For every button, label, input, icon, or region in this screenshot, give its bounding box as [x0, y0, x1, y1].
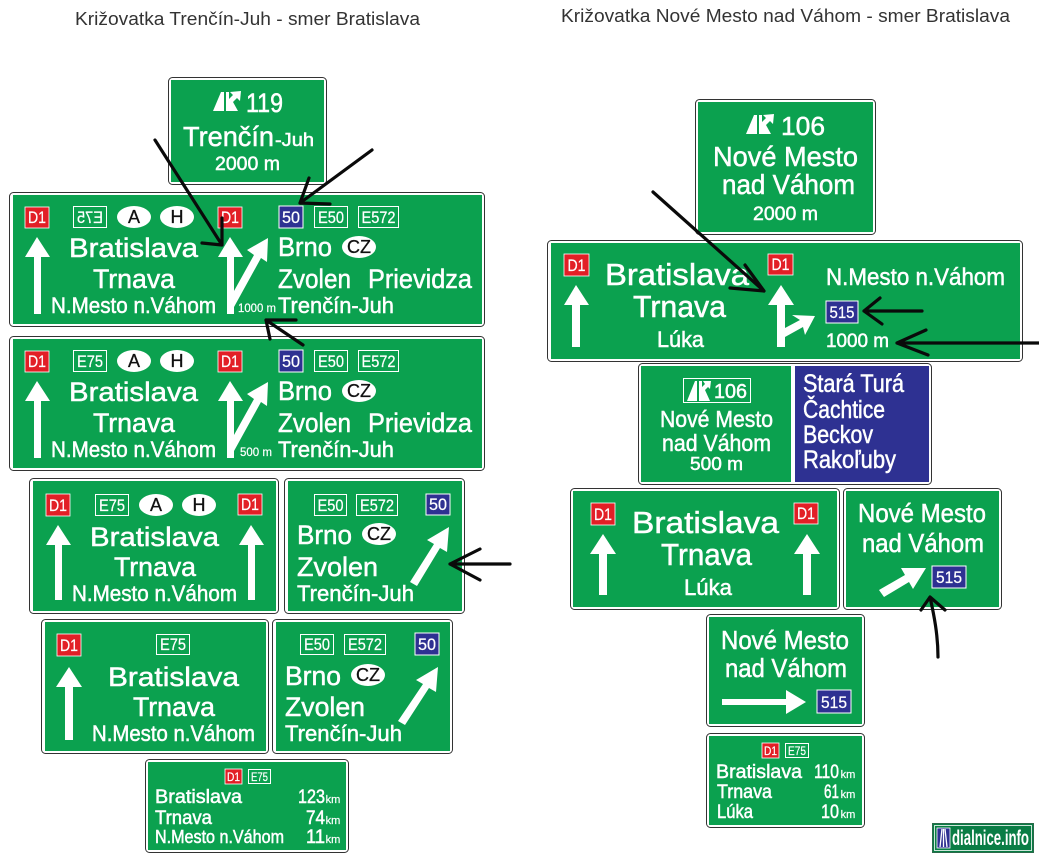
badge: E50: E50 [318, 352, 344, 371]
arrow: split [218, 237, 268, 314]
text: distances: 110 [814, 762, 839, 783]
annotation arrow: D1 right gantry [653, 192, 764, 291]
badge: A [139, 494, 173, 516]
arrow: straight [56, 667, 82, 740]
badge: H: H [170, 351, 184, 371]
distance: 2000 m [215, 154, 280, 175]
badge: E75: E75 [251, 770, 268, 784]
badge: D1: D1 [241, 495, 259, 514]
badge: 50 [279, 350, 303, 372]
badge: 50 [415, 633, 439, 655]
text: place names: Bratislava [716, 762, 802, 783]
badge: A: A [128, 351, 140, 371]
badge: E75: E75 [788, 744, 806, 758]
badge: D1: D1 [60, 636, 78, 655]
destination: Trenčín [183, 121, 274, 152]
sign: exit, Brno [272, 620, 452, 754]
badge: D1: D1 [28, 352, 46, 371]
text: place names: Bratislava [155, 787, 242, 808]
arrow: straight [564, 285, 589, 347]
text: destination: Nové Mesto [858, 498, 986, 528]
sign: straight lanes right [570, 488, 840, 610]
text: destination [858, 498, 986, 558]
sign: exit 119 Trenčín-Juh [168, 78, 326, 184]
annotation arrow: 1000 m right [897, 330, 1039, 355]
text: distances [298, 787, 340, 848]
badge: CZ [342, 380, 376, 402]
exit box: 106 [714, 381, 747, 403]
arrow: left straight [46, 525, 71, 600]
badge: H [160, 350, 194, 372]
badge: 50: 50 [282, 352, 300, 371]
badge: A [117, 350, 151, 372]
text: destination: nad Váhom [725, 653, 847, 683]
badge: E75: E75 [77, 352, 103, 371]
text: destinations: N.Mesto n.Váhom [51, 437, 216, 462]
annotation arrow: D1 on 1000 m sign [155, 140, 222, 245]
text: place names [716, 762, 802, 823]
arrow: right straight [794, 534, 820, 595]
text: destinations [285, 661, 402, 746]
badge: D1: D1 [49, 496, 67, 515]
text: place names: Lúka [717, 802, 753, 823]
text: destinations [51, 377, 216, 462]
text: destinations [72, 522, 237, 606]
text: destinations [297, 520, 414, 606]
text: distances: 61 [824, 782, 839, 803]
badge: D1: D1 [568, 256, 586, 275]
text: distances: 123 [298, 787, 325, 808]
badge: D1: D1 [594, 505, 612, 524]
text: destinations: N.Mesto n.Váhom [51, 293, 216, 318]
sign: exit ramp right [706, 614, 864, 726]
text: destinations: N.Mesto n.Váhom [72, 581, 237, 606]
exit number: 106 [781, 111, 825, 141]
annotation arrow: route 515 [864, 298, 922, 324]
text: destinations: Trnava [114, 552, 197, 582]
text: destination: Nové Mesto [660, 406, 773, 432]
text: exit destinations: Trenčín-Juh [278, 437, 394, 462]
text: destinations: Bratislava [108, 662, 240, 692]
badge: E75: E75 [99, 496, 125, 515]
text: distances: 11 [306, 827, 325, 848]
text: exit destinations [278, 232, 473, 318]
badge: E572: E572 [362, 352, 396, 371]
badge: D1: D1 [28, 208, 46, 227]
text: destinations: Bratislava [69, 377, 199, 407]
arrow: split [218, 381, 268, 458]
arrow: exit [410, 527, 449, 586]
text: exit destinations: Brno [278, 232, 332, 262]
title: right junction: Križovatka Nové Mesto nad Váhom - smer Bratislava [561, 5, 1011, 26]
annotation arrow: 1000 m [266, 320, 303, 345]
text: exit destinations: Trenčín-Juh [278, 293, 394, 318]
sign: straight, Bratislava [42, 620, 268, 754]
destination suffix: -Juh [275, 130, 314, 150]
text: destinations: Trnava [633, 289, 727, 324]
text: destinations: Bratislava [605, 257, 750, 292]
destination: Nové Mesto [713, 141, 858, 172]
badge: A [117, 206, 151, 228]
badge: H: H [192, 495, 206, 515]
badge: E572: E572 [348, 635, 382, 654]
text: distances: km [841, 769, 855, 781]
annotation arrow: 515 on exit sign [921, 597, 945, 657]
logo: dialnice.info [932, 824, 1034, 852]
badge: CZ [362, 523, 396, 545]
panel: blue towns [795, 366, 929, 482]
text: destinations: Lúka [684, 575, 733, 600]
text: exit destinations: Prievidza [368, 264, 473, 294]
sign: straight lanes, Bratislava [30, 478, 278, 614]
badge: 515: 515 [936, 568, 962, 587]
badge: 515 [817, 690, 851, 713]
text: destinations: Trenčín-Juh [285, 721, 402, 746]
text: exit destination: N.Mesto n.Váhom [826, 264, 1005, 291]
text: distances [814, 762, 855, 823]
text: exit destinations: Brno [278, 376, 332, 406]
text: destinations: Zvolen [285, 692, 365, 722]
text: destinations: Bratislava [69, 233, 199, 263]
text: destinations: Lúka [657, 327, 705, 352]
arrow: straight with right exit [768, 285, 815, 347]
text: place names [155, 787, 284, 847]
text: distances: km [841, 809, 855, 821]
text: distances: km [326, 834, 340, 846]
distance: 1000 m [826, 331, 889, 352]
badge: H: H [170, 207, 184, 227]
arrow: right straight [239, 525, 264, 600]
arrow: left straight [590, 534, 616, 595]
text: distances: 10 [821, 802, 839, 823]
sign: 500 m gantry [10, 336, 484, 470]
text: destinations: Brno [285, 661, 341, 691]
text: place names: Trnava [155, 808, 212, 829]
distance: 2000 m [753, 204, 818, 225]
text: destinations: Trnava [133, 692, 216, 722]
text: destination: nad Váhom [862, 528, 984, 558]
sign: exit lane right [844, 488, 1002, 610]
text: destinations: Trnava [661, 537, 753, 572]
panel: blue towns: Stará Turá [803, 370, 904, 398]
text: distances: km [326, 794, 340, 806]
badge: 50: 50 [418, 635, 436, 654]
icon: exit pictogram [213, 91, 241, 111]
badge: D1: D1 [772, 255, 790, 274]
badge: CZ: CZ [347, 237, 371, 257]
destination [713, 141, 858, 200]
text: distances: 74 [306, 808, 325, 829]
badge: 515: 515 [830, 303, 854, 322]
badge: D1: D1 [221, 352, 239, 371]
badge: CZ: CZ [367, 524, 391, 544]
panel: green exit [641, 366, 791, 482]
badge: A: A [128, 207, 140, 227]
text: exit destinations: Zvolen [278, 264, 351, 294]
text: destinations: Trnava [93, 264, 176, 294]
panel: blue towns: Beckov [803, 421, 873, 449]
exit box [684, 378, 750, 403]
text: exit destinations: Zvolen [278, 408, 351, 438]
text: destinations: Trnava [93, 408, 176, 438]
badge: 50: 50 [282, 208, 300, 227]
icon: exit pictogram [746, 114, 774, 134]
badge: 50: 50 [429, 495, 447, 514]
text: destinations: Zvolen [297, 552, 378, 582]
sign: gantry 1000 m right [548, 240, 1022, 362]
text: destinations: Bratislava [90, 522, 220, 552]
badge: D1: D1 [227, 770, 240, 784]
badge: E50: E50 [304, 635, 330, 654]
sign: distances left [146, 760, 348, 852]
badge: CZ: CZ [356, 665, 380, 685]
badge: D1: D1 [764, 744, 777, 758]
text: destination [721, 625, 849, 683]
badge: 50 [279, 206, 303, 228]
exit number: 119 [246, 88, 283, 118]
text: destinations: N.Mesto n.Váhom [92, 721, 255, 746]
arrow: exit [879, 568, 926, 597]
badge: E75 mirrored: E75 [77, 208, 103, 227]
text: destinations [632, 505, 780, 600]
text: destinations [605, 257, 750, 352]
text: distances: km [326, 815, 340, 827]
text: exit destinations: Prievidza [368, 408, 473, 438]
sign: exit 106, 500 m and connected towns [638, 364, 932, 484]
distance: 500 m [240, 445, 272, 459]
arrow: exit [398, 667, 438, 725]
text: destination: nad Váhom [662, 430, 771, 456]
badge: D1: D1 [797, 504, 815, 523]
text: place names: Trnava [717, 782, 772, 803]
sign: exit 106 Nové Mesto [696, 100, 876, 234]
badge: E50: E50 [318, 208, 344, 227]
text: destination [660, 406, 773, 474]
text: place names: N.Mesto n.Váhom [155, 827, 284, 847]
arrow: right [722, 690, 806, 714]
badge: D1: D1 [221, 208, 239, 227]
text: destinations [51, 233, 216, 318]
sign: 1000 m gantry [10, 192, 484, 326]
arrow: straight [25, 237, 50, 314]
panel: blue towns: Rakoľuby [803, 446, 896, 474]
destination: nad Váhom [722, 169, 855, 200]
text: destinations: Brno [297, 520, 352, 550]
panel: blue towns: Čachtice [803, 395, 885, 424]
annotation arrow: exit lane sign [450, 549, 510, 580]
badge: H [160, 206, 194, 228]
text: destinations: Trenčín-Juh [297, 581, 414, 606]
text: destinations: Bratislava [632, 505, 780, 540]
badge: E572: E572 [362, 208, 396, 227]
badge: A: A [150, 495, 162, 515]
arrow: straight [25, 381, 50, 458]
badge: CZ [342, 236, 376, 258]
text: distances: km [841, 789, 855, 801]
text: destination: Nové Mesto [721, 625, 849, 655]
text: destinations [92, 662, 255, 746]
badge: E75: E75 [160, 635, 186, 654]
sign: distances right [706, 734, 864, 828]
distance: 1000 m [238, 301, 276, 315]
text: destination: 500 m [690, 454, 743, 474]
badge: 515: 515 [821, 693, 847, 712]
badge: CZ [351, 664, 385, 686]
badge: CZ: CZ [347, 381, 371, 401]
text: exit destinations [278, 376, 473, 462]
badge: E572: E572 [360, 496, 394, 515]
badge: H [182, 494, 216, 516]
sign: exit lane, Brno [284, 478, 464, 614]
annotation arrow: route 50 [300, 150, 372, 204]
title: left junction: Križovatka Trenčín-Juh - smer Bratislava [75, 8, 421, 29]
badge: E50: E50 [318, 496, 344, 515]
